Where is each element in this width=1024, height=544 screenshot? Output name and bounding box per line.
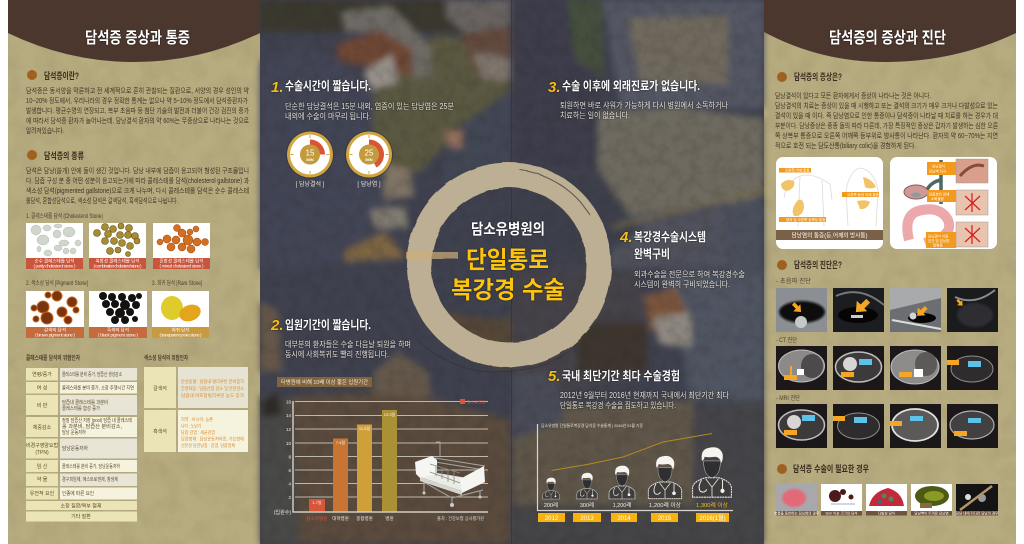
icon: 15 min clock: 15	[306, 148, 315, 158]
paragraph	[285, 339, 411, 359]
bar 1	[309, 499, 325, 512]
case images	[774, 484, 999, 516]
table: pigment stone risk factors: 담즙정체 : 담낭운동저하증, 기능장애	[181, 436, 244, 442]
body text: 담석은 담낭(쓸개) 안에 돌이 생긴 것입니다. 담낭 내부에 담즙이 응고되어 형성된 구조물입니	[26, 166, 249, 175]
x-axis labels: 담소유병원	[307, 515, 327, 522]
body text	[26, 166, 249, 205]
section 5: most surgical experience	[538, 368, 733, 522]
stone card 1: 순수 콜레스테롤 담석	[35, 258, 74, 264]
table heading: 색소성 담석의 위험인자	[144, 354, 188, 362]
panel: when surgery is needed	[774, 463, 999, 516]
paragraph	[560, 390, 730, 410]
ultrasound label: - 초음파 진단	[776, 277, 812, 285]
paragraph: 대부분의 환자들은 수술 다음날 퇴원을 하며	[285, 339, 411, 349]
subheading: rare stones: 3. 희귀 담석 [Rare Stone]	[152, 279, 202, 287]
x-axis labels: 병원	[385, 515, 394, 521]
paragraph	[634, 269, 745, 289]
table: cholesterol stone risk factors: 연령/증가	[32, 371, 52, 378]
year labels: 2016(1월)	[699, 514, 726, 522]
stone card 6: 희귀 담석	[172, 326, 189, 334]
case labels: 200례	[544, 501, 558, 509]
chart label	[277, 377, 372, 387]
heading	[548, 78, 700, 96]
stone card 3: 혼합성 콜레스테롤 담석	[160, 258, 203, 264]
card: gallbladder anatomy: 합병증	[933, 242, 943, 248]
case labels	[544, 501, 728, 509]
paragraph	[285, 101, 454, 121]
paragraph: 2012년 9월부터 2016년 현재까지 국내에서 최단기간 최다	[560, 390, 730, 400]
center ring	[406, 170, 599, 372]
title: single port laparoscopic surgery: 단일통로	[466, 247, 549, 274]
table: pigment stone risk factors: 지역 : 아시아, 농촌	[181, 416, 213, 423]
body text	[775, 91, 998, 150]
heading: 담석증 수술이 필요한 경우	[793, 463, 869, 474]
x-axis labels: 대학병원	[332, 515, 349, 522]
case images: 다발성 담석	[878, 510, 895, 516]
paragraph: 퇴원하면 바로 샤워가 가능하게 다시 병원에서 소독하거나	[560, 100, 729, 110]
stone card 2	[89, 223, 146, 269]
panel: diagnosis	[776, 259, 998, 448]
title: single port laparoscopic surgery: 담소유병원의	[471, 221, 545, 238]
heading	[270, 317, 371, 334]
card: referred pain diagram: 명치 및 오른쪽 상복부 통증	[786, 217, 826, 222]
body text: 다. 담즙 구성 분 중 어떤 성분이 응고되는가에 따라 콜레스테롤 담석(cholesterol gallstone) 과	[26, 176, 249, 185]
stone card 2: ( combination cholesterol stone )	[94, 264, 142, 268]
left header band	[8, 0, 260, 62]
body text: 롤담석, 혼합성담석으로, 색소성 담석은 갈색담석, 흑색담석으로 나뉩니다.	[26, 196, 178, 205]
stone card 4	[26, 291, 84, 338]
icon: 25 min clock	[345, 130, 393, 178]
clock label: [ 담낭염 ]	[357, 180, 381, 188]
paragraph: 외과수술을 전문으로 하여 복강경수술	[634, 269, 745, 279]
icon: bullet	[27, 70, 37, 80]
stone card 3: ( mixed cholesterol stone )	[160, 264, 204, 268]
section 3: no follow-up visits	[548, 78, 729, 120]
heading: 담석증의 증상은?	[794, 71, 842, 82]
bar 2	[333, 438, 348, 512]
table: cholesterol stone risk factors: 인종에 따른 요인	[62, 490, 94, 497]
CT images	[776, 346, 998, 390]
chart label: 타병원에 비해 10배 이상 짧은 입원기간	[281, 378, 368, 386]
panel: what is gallstone	[26, 70, 249, 135]
paragraph: 치료하는 일이 없습니다.	[560, 110, 630, 120]
clock label: [ 담낭결석 ]	[296, 180, 325, 188]
icon: hospital bed	[415, 442, 485, 507]
year labels: 2014	[617, 516, 631, 522]
heading: 수술시간이 짧습니다.	[285, 78, 371, 93]
card: gallbladder anatomy: 담낭결석 이동	[928, 234, 949, 238]
bar 3: 11.0일	[359, 425, 370, 431]
bar 3	[357, 424, 372, 512]
table: cholesterol stone risk factors: 비 만	[37, 402, 48, 409]
year labels: 2012	[545, 516, 559, 522]
table: pigment stone risk factors: 선천성 담관낭종 : 감염, 담즙정체	[181, 442, 235, 449]
left panel title: 담석증 증상과 통증	[85, 29, 190, 47]
table: cholesterol stone risk factors: 임 신	[37, 463, 48, 470]
table: cholesterol stone risk factors: 소장 질환/복부 절제	[61, 502, 102, 510]
bar chart: hospital stay: 16	[286, 400, 291, 404]
icon: 15 min clock: MIN	[306, 157, 314, 162]
case labels: 1,200례	[613, 501, 631, 509]
stone card 5: ( black pigment stone )	[98, 332, 138, 338]
card: referred pain diagram: 담낭염의 통증(등,어깨의 방사통)	[792, 232, 868, 240]
icon: bullet	[777, 464, 787, 474]
heading: 담석증의 진단은?	[794, 259, 842, 270]
bar 4	[382, 410, 397, 512]
table: cholesterol stone risk factors: 기타 질환	[71, 513, 91, 520]
year labels: 2015	[658, 516, 672, 522]
icon: bullet	[777, 72, 787, 82]
icon: 15 min clock	[286, 130, 334, 178]
table: cholesterol stone risk factors: 여 성	[37, 384, 47, 392]
ultrasound images	[776, 288, 998, 332]
table: cholesterol stone risk factors: 담낭 운동저하	[62, 429, 86, 436]
table: pigment stone risk factors	[144, 354, 248, 452]
year labels	[538, 513, 729, 522]
stone card 4: ( brown pigment stone )	[35, 332, 76, 338]
card: gallbladder anatomy: 소화불량	[931, 196, 945, 201]
stone card 6	[152, 291, 209, 338]
case labels: 300례	[580, 501, 594, 509]
body text: 담석증은 동서양을 막론하고 전 세계적으로 흔히 관찰되는 질환으로, 서양의 경우 성인의 약	[26, 86, 249, 95]
case images: 3cm 이상 크기의 담석	[825, 510, 858, 516]
paragraph: 단순한 담낭결석은 15분 내외, 염증이 있는 담낭염은 25분	[285, 101, 454, 111]
right header band	[764, 0, 1016, 62]
heading: 1.	[271, 79, 284, 96]
MRI label: - MRI 진단	[776, 394, 800, 402]
table: cholesterol stone risk factors	[26, 354, 137, 522]
table: pigment stone risk factors: 만성용혈 : 담즙내 빌리루빈 분비증가	[181, 378, 244, 385]
body text: 색소성 담석(pigmented gallstone)으로 크게 나누며, 다시 콜레스테롤 담석은 순수 콜레스테	[26, 186, 249, 195]
table: cholesterol stone risk factors: 롤 과분비, 담즙산 분비감소,	[62, 423, 122, 430]
year labels: 2013	[580, 516, 594, 522]
bar chart: hospital stay	[274, 398, 488, 522]
section 1: short operation time	[271, 78, 454, 188]
case images: 복통을 동반하는 담낭염의 경우	[774, 510, 820, 516]
paragraph	[560, 100, 729, 120]
heading: 담석증의 종류	[44, 150, 84, 161]
table: pigment stone risk factors: 갈색석	[153, 385, 167, 392]
heading: 5.	[548, 368, 561, 385]
bar chart: hospital stay: 4	[288, 482, 291, 486]
title: single port laparoscopic surgery	[451, 221, 565, 304]
table: cholesterol stone risk factors: 비경구영양요법	[26, 442, 58, 449]
heading: 국내 최단기간 최다 수술경험	[562, 368, 680, 383]
paragraph: 동시에 사회복귀도 빨리 진행됩니다.	[285, 349, 389, 359]
table: cholesterol stone risk factors: 약 물	[37, 476, 48, 483]
body text: 알려져있습니다.	[26, 126, 64, 135]
heading: 입원기간이 짧습니다.	[285, 317, 371, 332]
body text: 발생합니다. 평균수명의 연장되고, 복부 초음파 등 첨단 기술의 발전과 더불어 건강 검진의 증가	[26, 106, 249, 115]
heading	[271, 78, 371, 96]
stone card 6: ( transparency rare stone )	[160, 332, 202, 338]
stone card 1	[26, 223, 83, 269]
heading: 복강경수술시스템	[634, 230, 706, 244]
source: 출처 : 건강보험 심사평가원	[437, 515, 484, 522]
legend	[460, 398, 486, 404]
trend line	[552, 434, 712, 470]
paragraph: 단일통로 복강경 수술을 집도하고 있습니다.	[560, 400, 676, 410]
section 2: short hospital stay	[270, 0, 1016, 522]
card: gallbladder anatomy: 담즙분비 장애	[929, 192, 949, 196]
stone card 1: ( purity cholesterol stone )	[34, 264, 76, 268]
heading: 4.	[619, 229, 633, 246]
table: cholesterol stone risk factors: 담낭운동저하	[62, 445, 88, 452]
card: referred pain diagram	[776, 157, 883, 249]
table: cholesterol stone risk factors: (TPN)	[35, 450, 49, 456]
table: pigment stone risk factors: 담즙 감염 : 세균감염	[181, 429, 215, 436]
x-axis labels	[307, 515, 394, 522]
icons: doctors	[543, 447, 731, 499]
heading: 수술 이후에 외래진료가 없습니다.	[562, 78, 700, 93]
icon: bullet	[777, 260, 787, 270]
subheading: cholesterol stones: 1. 콜레스테롤 담석 (Cholesterol Stone)	[26, 212, 103, 220]
chart: surgical volume by year	[538, 422, 733, 522]
paragraph: 시스템이 완벽히 구비되었습니다.	[634, 279, 730, 289]
table: cholesterol stone risk factors: 콜레스테롤 분비 증가, 담낭운동저하	[62, 463, 120, 470]
card: gallbladder anatomy	[890, 157, 997, 249]
icon: 25 min clock: 25	[365, 148, 374, 158]
case labels: 1,200례 이상	[649, 501, 681, 509]
panel: symptoms	[775, 71, 998, 249]
heading: 2.	[270, 317, 284, 334]
bar 1: 1.7일	[312, 499, 322, 505]
card: referred pain diagram: 오른쪽 등과 어깨 통증	[847, 192, 880, 197]
heading	[548, 368, 680, 385]
heading	[619, 229, 706, 261]
icon: bullet	[27, 150, 37, 160]
body text	[26, 86, 249, 135]
table: cholesterol stone risk factors: 정질 담즙산 저장 (pool) 담즙 내 콜레스테	[62, 417, 132, 424]
x-axis labels: 종합병원	[356, 515, 373, 521]
table: pigment stone risk factors: 간경화증 : 담즙산염 감소 및 분분감소	[181, 385, 244, 392]
heading: 완벽구비	[634, 247, 670, 261]
card: gallbladder anatomy: 담낭벽 자극	[929, 168, 947, 174]
stone card 5: 흑색의 담석	[107, 326, 129, 334]
stone card 3	[153, 223, 210, 269]
bar chart: hospital stay: 2	[288, 495, 291, 500]
table: pigment stone risk factors: 나이 : 노년기	[181, 422, 201, 430]
stone card 2: 복합성 콜레스테롤 담석	[96, 258, 139, 264]
card: gallbladder anatomy: 담낭결석	[932, 164, 945, 168]
bar chart: hospital stay: 6	[288, 468, 291, 473]
table: pigment stone risk factors: 흑색석	[153, 428, 167, 435]
table: pigment stone risk factors: 담즙내 비포합빌리루빈 농도 증가	[181, 392, 244, 399]
bar chart: hospital stay: 14	[286, 413, 291, 418]
table: cholesterol stone risk factors: 콜레스테롤 분비 증가, 담즙산 생성감소	[62, 371, 122, 378]
case labels: 1,300례 이상	[696, 501, 728, 509]
paragraph: 내외에 수술이 마무리 됩니다.	[285, 111, 371, 121]
section 4: complete laparoscopic system	[619, 229, 745, 289]
heading: 3.	[548, 79, 561, 96]
panel: gallstone types	[26, 150, 249, 338]
icon: 25 min clock: MIN	[365, 157, 373, 162]
stone card 4: 갈색의 담석	[44, 326, 66, 334]
body text: 담낭결석이 있다고 모든 환자에게서 증상이 나타나는 것은 아니다.	[775, 91, 931, 100]
MRI images	[776, 404, 998, 448]
bar 2: 7.4일	[336, 439, 345, 445]
case images: 담낭벽이 두꺼운 담낭염	[914, 510, 949, 516]
subheading: pigment stones: 2. 색소성 담석 [Pigment Stone]	[26, 279, 88, 287]
right panel title: 담석증의 증상과 진단	[829, 29, 946, 47]
case images: 담낭 내에 커다란 담낭의 경우	[956, 510, 999, 516]
panel: center surgery photo background	[260, 0, 764, 544]
table: cholesterol stone risk factors: 담즙내 콜레스테롤 과분비	[62, 399, 108, 406]
card: referred pain diagram: 오른쪽 어깨 통증	[785, 168, 810, 172]
body text: 적으로 호전 되는 담도산통(biliary colic)을 경험하게 된다.	[775, 141, 916, 150]
chart caption: 담소유병원 단일통로복강경 담석증 수술통계 | 2016년 01월 기준	[541, 422, 643, 428]
title: single port laparoscopic surgery: 복강경 수술	[451, 277, 565, 304]
CT label: - CT 진단	[776, 336, 797, 344]
card: gallbladder anatomy: 담관 및 담낭염	[928, 238, 949, 243]
table: cholesterol stone risk factors: 유전적 요인	[30, 490, 55, 497]
table: cholesterol stone risk factors: 체중감소	[33, 424, 52, 431]
body text: 10~20% 정도에서, 우리나라의 경우 정확한 통계는 없으나 약 5~10% 정도에서 담석증환자가	[26, 96, 248, 105]
bar chart: hospital stay: 10	[286, 441, 291, 446]
legend: 담소유병원	[467, 398, 486, 404]
bar 4: 13.3일	[384, 411, 396, 417]
table: cholesterol stone risk factors: 콜레스테롤 합성 증가	[62, 405, 100, 412]
bar chart: hospital stay: 8	[288, 454, 291, 460]
heading: 담석증이란?	[44, 70, 79, 81]
bar chart: hospital stay: (입원수)	[274, 509, 291, 516]
bar chart: hospital stay: 12	[286, 427, 291, 432]
table: cholesterol stone risk factors: 경구피임제, 에스트로겐제, 항생제	[62, 476, 118, 483]
stone card 5	[89, 291, 147, 338]
table heading: 콜레스테롤 담석의 위험인자	[26, 354, 80, 362]
table: cholesterol stone risk factors: 콜레스테롤 분비 증가, 소장 주행시간 지연	[62, 384, 134, 392]
body text: 에 따라서 담석증 환자가 늘어나는데, 담낭결석 환자의 약 60%는 무증상으로 나타나는 것으로	[26, 116, 249, 125]
